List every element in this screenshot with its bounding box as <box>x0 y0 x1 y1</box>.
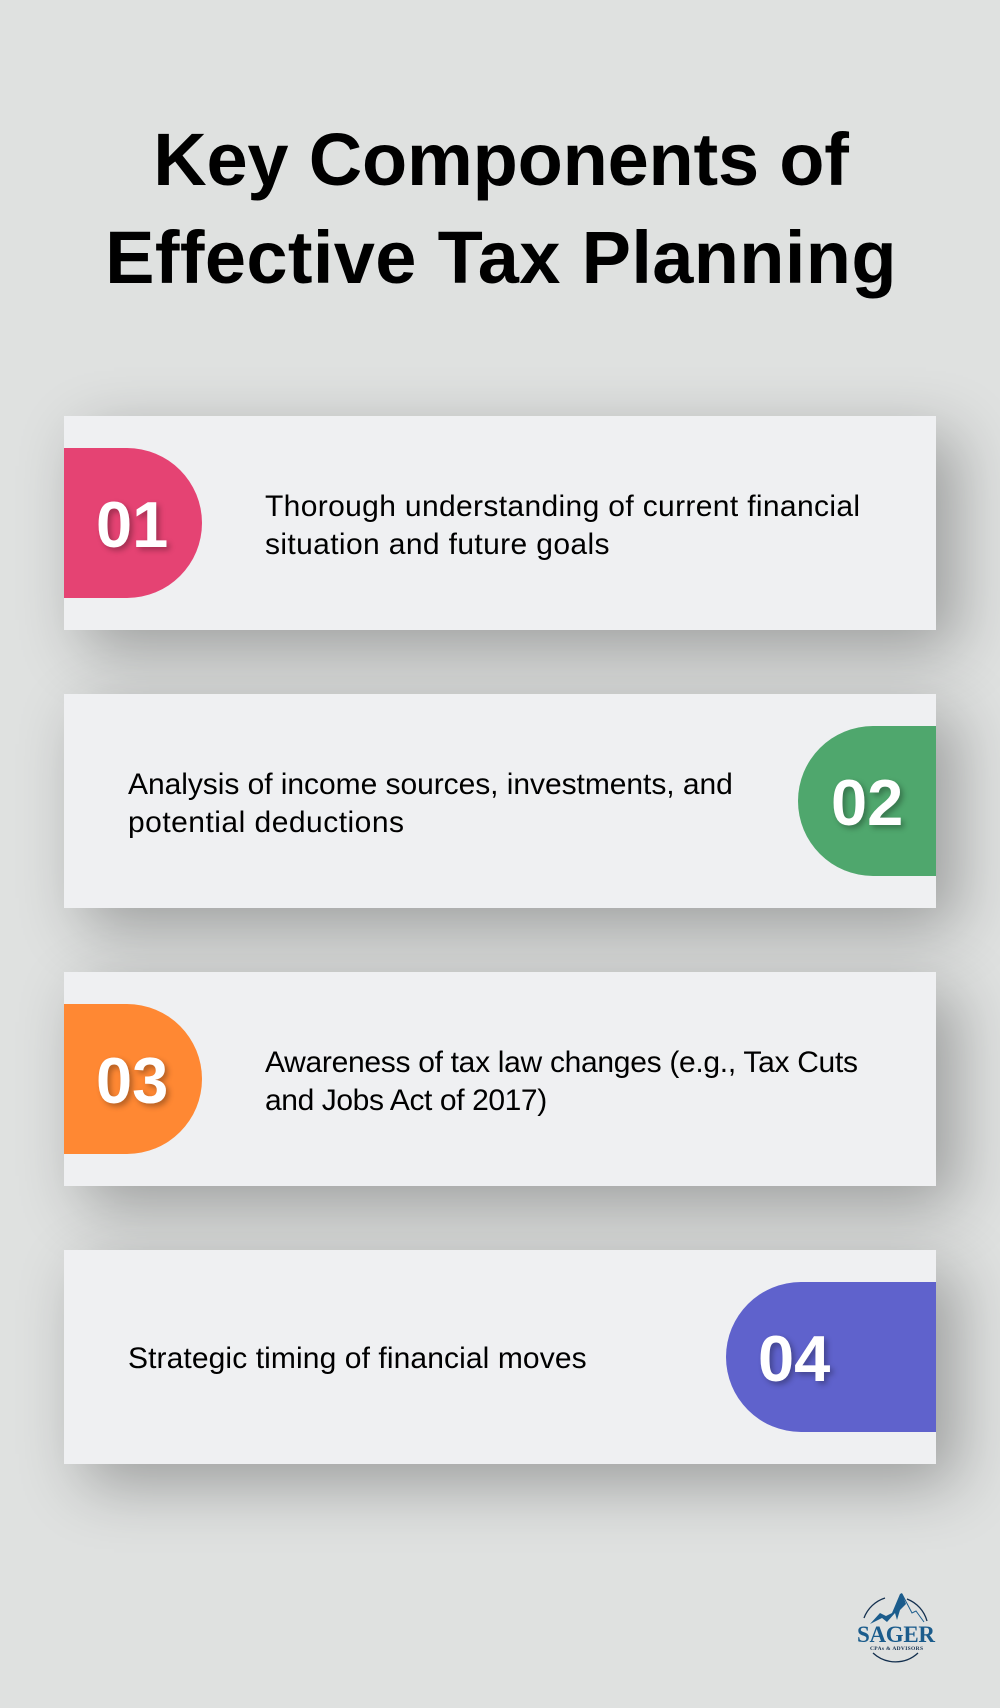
badge: 02 <box>798 726 936 876</box>
wordmark: SAGER <box>857 1622 935 1647</box>
badge: 03 <box>64 1004 202 1154</box>
panel: step 04 <box>64 1250 936 1464</box>
text: step 03 description <box>265 1046 858 1117</box>
badge: 03: 03 <box>96 1044 168 1117</box>
text: step 01 description: Thorough understanding of current financial <box>265 490 860 523</box>
panel: step 03 <box>64 972 936 1186</box>
text: step 01 description: situation and future goals <box>265 528 610 561</box>
title <box>105 118 897 299</box>
text: step 04 description: Strategic timing of financial moves <box>128 1342 587 1375</box>
badge: 04: 04 <box>758 1322 830 1395</box>
badge: 01 <box>64 448 202 598</box>
icon: circle arcs <box>864 1598 927 1662</box>
logo: Sager CPAs & Advisors <box>857 1593 936 1662</box>
badge: 02: 02 <box>831 766 903 839</box>
tagline: CPAs & ADVISORS <box>870 1646 923 1652</box>
panel: step 01 <box>64 416 936 630</box>
title: Key Components of <box>153 118 849 201</box>
badge: 01: 01 <box>96 488 168 561</box>
title: Effective Tax Planning <box>105 216 897 299</box>
text: step 02 description: Analysis of income sources, investments, and <box>128 768 733 801</box>
text: step 02 description: potential deductions <box>128 806 404 839</box>
text: step 02 description <box>128 768 733 839</box>
panel: step 02 <box>64 694 936 908</box>
text: step 01 description <box>265 490 860 561</box>
icon: mountain <box>870 1593 924 1624</box>
badge: 04 <box>726 1282 936 1432</box>
text: step 03 description: Awareness of tax law changes (e.g., Tax Cuts <box>265 1046 858 1079</box>
text: step 03 description: and Jobs Act of 2017) <box>265 1084 547 1117</box>
